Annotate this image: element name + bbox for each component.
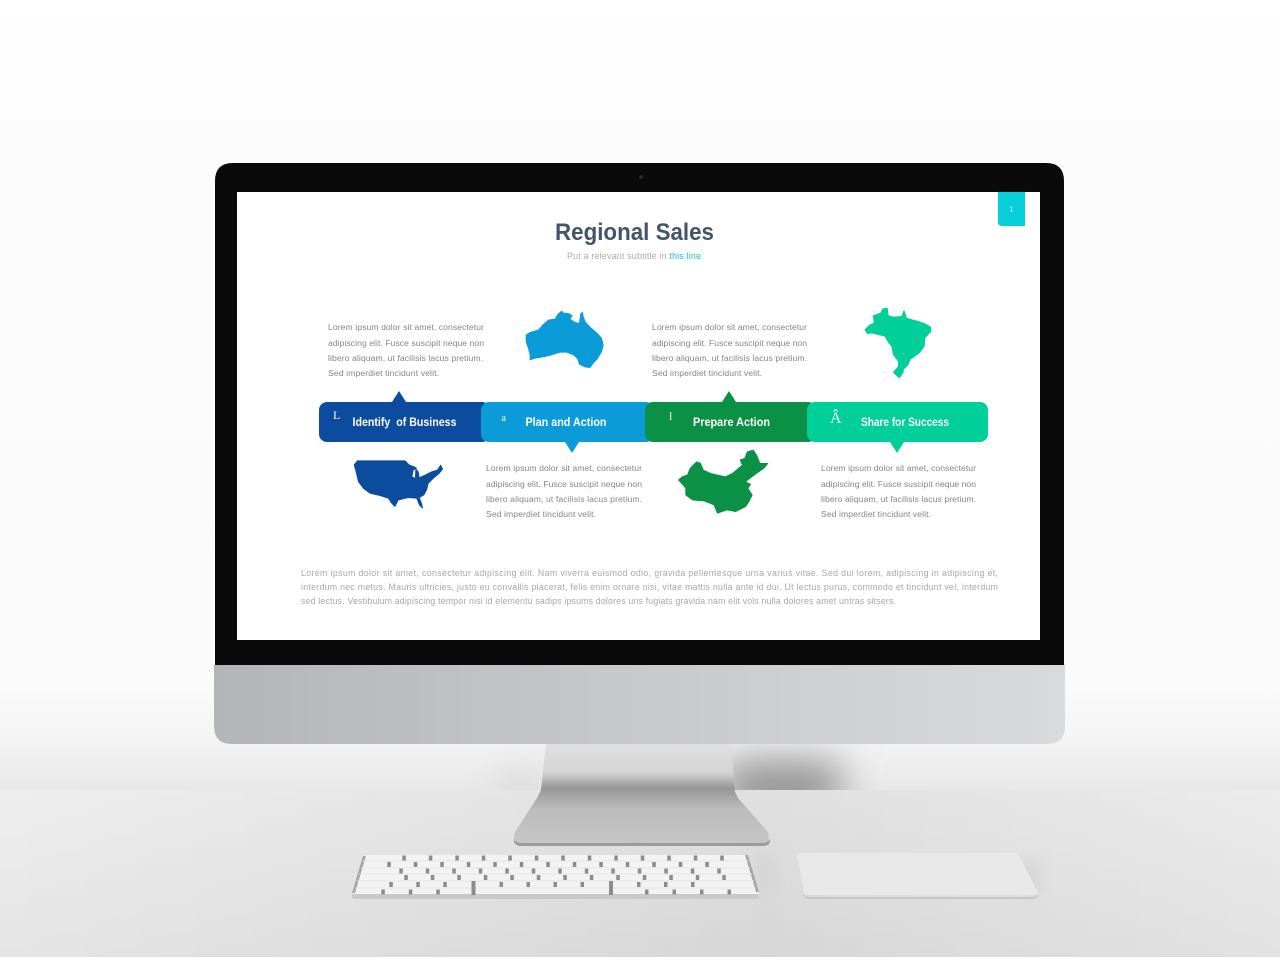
text block: top left: adipiscing elit. Fusce suscipit neque non: [328, 338, 484, 348]
map: Brazil: [865, 308, 931, 378]
text block: top left: Lorem ipsum dolor sit amet, consectetur: [328, 322, 484, 332]
text block: top right: Lorem ipsum dolor sit amet, consectetur: [652, 322, 807, 332]
step bar: [319, 391, 988, 453]
subtitle: Put a relevant subtitle in this line: [567, 251, 701, 261]
segment: Plan and Action: [481, 402, 654, 453]
footer paragraph: [301, 568, 998, 606]
label: Plan and Action: Plan and Action: [526, 417, 606, 429]
segment: Prepare Action: [645, 391, 816, 442]
keyboard: [352, 855, 759, 899]
title: Regional Sales: [555, 219, 714, 246]
footer paragraph: interdum nec metus. Mauris ultricies, justo eu convallis placerat, felis enim ornare nisi, vitae mattis nulla ante id dui. Ut lectus purus, commodo et tincidunt vel, interdum: [301, 582, 998, 592]
text block: top right: [652, 322, 807, 378]
text block: top left: libero aliquam, ut facilisis lacus pretium.: [328, 353, 483, 363]
footer paragraph: Lorem ipsum dolor sit amet, consectetur adipiscing elit. Nam viverra euismod odio, gravida pellentesque urna varius vitae. Sed dui lorem, adipiscing in adipiscing et,: [301, 568, 998, 578]
text block: top right: Sed imperdiet tincidunt velit.: [652, 368, 762, 378]
segment: Share for Success: [807, 402, 988, 453]
webcam: [639, 175, 643, 179]
icon glyph: A circumflex: Â: [830, 408, 842, 427]
monitor chin: [214, 665, 1065, 744]
page number tab: 1: [1009, 204, 1014, 214]
text block: bottom right: libero aliquam, ut facilisis lacus pretium.: [821, 494, 976, 504]
screen: slide: [237, 192, 1040, 640]
text block: bottom left: adipiscing elit. Fusce suscipit neque non: [486, 479, 642, 489]
label: Identify of Business: Identify of Business: [352, 417, 456, 429]
text block: top right: libero aliquam, ut facilisis lacus pretium.: [652, 353, 807, 363]
background: wall and desk: [0, 717, 1280, 957]
text block: bottom left: Lorem ipsum dolor sit amet, consectetur: [486, 463, 642, 473]
label: Share for Success: Share for Success: [861, 417, 949, 429]
map: China: [678, 450, 768, 513]
segment: Identify of Business: [319, 391, 490, 442]
icon glyph: a: a: [502, 413, 506, 424]
text block: bottom left: libero aliquam, ut facilisis lacus pretium.: [486, 494, 642, 504]
monitor stand: [514, 744, 770, 846]
icon glyph: L: L: [333, 408, 340, 422]
icon glyph: l: l: [669, 409, 673, 423]
text block: bottom right: [821, 463, 976, 519]
text block: bottom right: Lorem ipsum dolor sit amet, consectetur: [821, 463, 976, 473]
map: Australia: [526, 311, 603, 368]
text block: top left: [328, 322, 484, 378]
footer paragraph: sed lectus. Vestibulum adipiscing tempor nisi id elementu sadips ipsums dolores uns fugiats gravida nam elit vols nulla dolores amet untras sitsers.: [301, 596, 896, 606]
text block: top left: Sed imperdiet tincidunt velit.: [328, 368, 439, 378]
monitor: [214, 163, 1065, 744]
label: Prepare Action: Prepare Action: [693, 417, 770, 429]
text block: bottom right: adipiscing elit. Fusce suscipit neque non: [821, 479, 976, 489]
page number tab: [998, 192, 1025, 226]
trackpad: [797, 853, 1038, 899]
text block: bottom left: [486, 463, 642, 519]
text block: bottom left: Sed imperdiet tincidunt velit.: [486, 509, 596, 519]
text block: bottom right: Sed imperdiet tincidunt velit.: [821, 509, 931, 519]
text block: top right: adipiscing elit. Fusce suscipit neque non: [652, 338, 807, 348]
map: USA: [354, 461, 443, 508]
